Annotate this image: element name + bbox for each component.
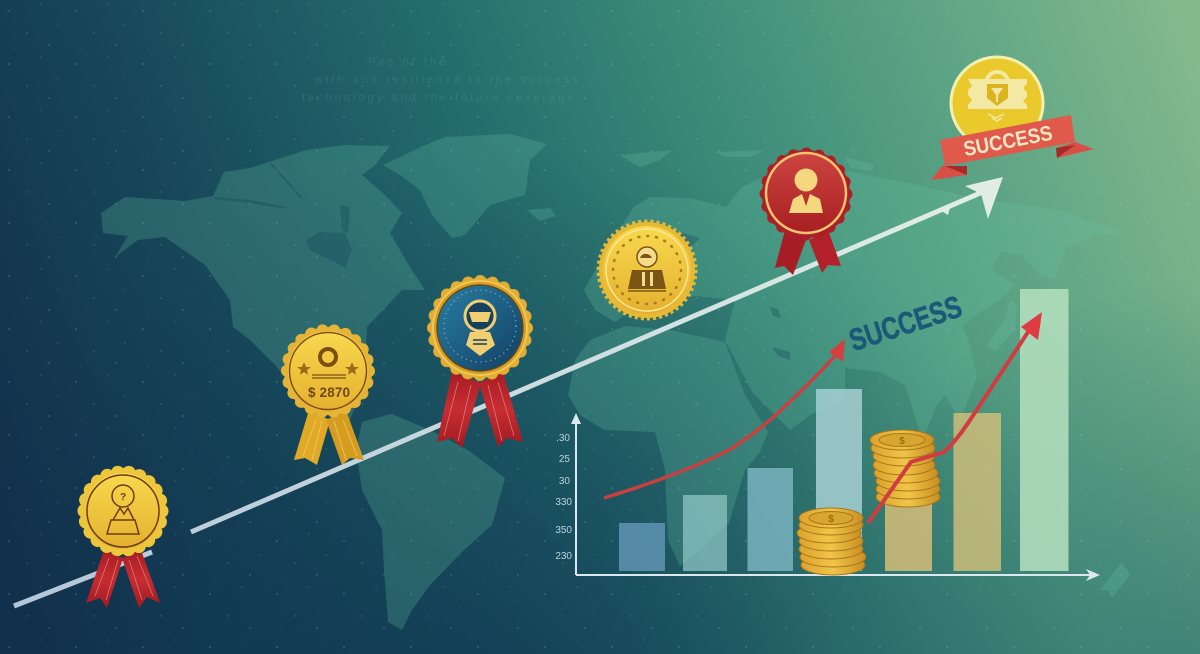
success ribbon banner: SUCCESS bbox=[962, 122, 1054, 161]
success ribbon banner bbox=[931, 115, 1094, 180]
greenland bbox=[383, 134, 547, 238]
red trend line right bbox=[868, 312, 1042, 523]
south america bbox=[356, 414, 505, 630]
badge 3: blue and gold with red ribbon bbox=[430, 278, 530, 448]
growth arrow bbox=[14, 177, 1003, 606]
axis labels: 25 bbox=[559, 454, 570, 465]
australia fragment bbox=[1100, 562, 1130, 598]
eurasia bbox=[584, 168, 1124, 440]
bars bbox=[619, 289, 1068, 571]
axis labels: 350 bbox=[555, 525, 572, 536]
top badge: yellow lock medallion bbox=[951, 57, 1043, 149]
axis labels: 330 bbox=[555, 497, 572, 508]
faint background text: technology and the future coverage bbox=[302, 92, 576, 104]
badge 4: gold seal bbox=[599, 222, 695, 318]
blue success label: SUCCESS bbox=[845, 289, 966, 358]
axis labels: .30 bbox=[556, 433, 570, 444]
badge 2: gold ribbon with dollar value: $ 2870 bbox=[308, 385, 350, 400]
arctic islands bbox=[619, 150, 672, 167]
badge 1: gold with red ribbon bbox=[81, 469, 165, 608]
axis labels: 230 bbox=[555, 551, 572, 562]
axis labels: 30 bbox=[559, 476, 570, 487]
bar chart bbox=[555, 289, 1100, 581]
iceland bbox=[527, 208, 556, 221]
axes bbox=[576, 418, 1092, 575]
faint background text: with and resilience to the success bbox=[314, 74, 581, 86]
coin stack: rear bbox=[870, 430, 940, 507]
coin stack: front: $ bbox=[828, 514, 834, 525]
dark inland seas bbox=[214, 163, 790, 360]
red trend line left bbox=[604, 339, 845, 498]
africa bbox=[568, 326, 768, 566]
faint background text bbox=[302, 56, 581, 104]
japan bbox=[987, 300, 1017, 352]
badge 1: gold with red ribbon: ? bbox=[120, 492, 126, 503]
coin stack: front bbox=[797, 508, 866, 575]
world map bbox=[101, 134, 1130, 630]
badge 5: red person badge bbox=[762, 150, 850, 275]
axis labels bbox=[555, 433, 572, 562]
north america bbox=[101, 145, 425, 420]
faint background text: Res of the bbox=[368, 56, 448, 68]
badge 2: gold ribbon with dollar value bbox=[284, 327, 372, 465]
coin stack: rear: $ bbox=[899, 436, 905, 447]
